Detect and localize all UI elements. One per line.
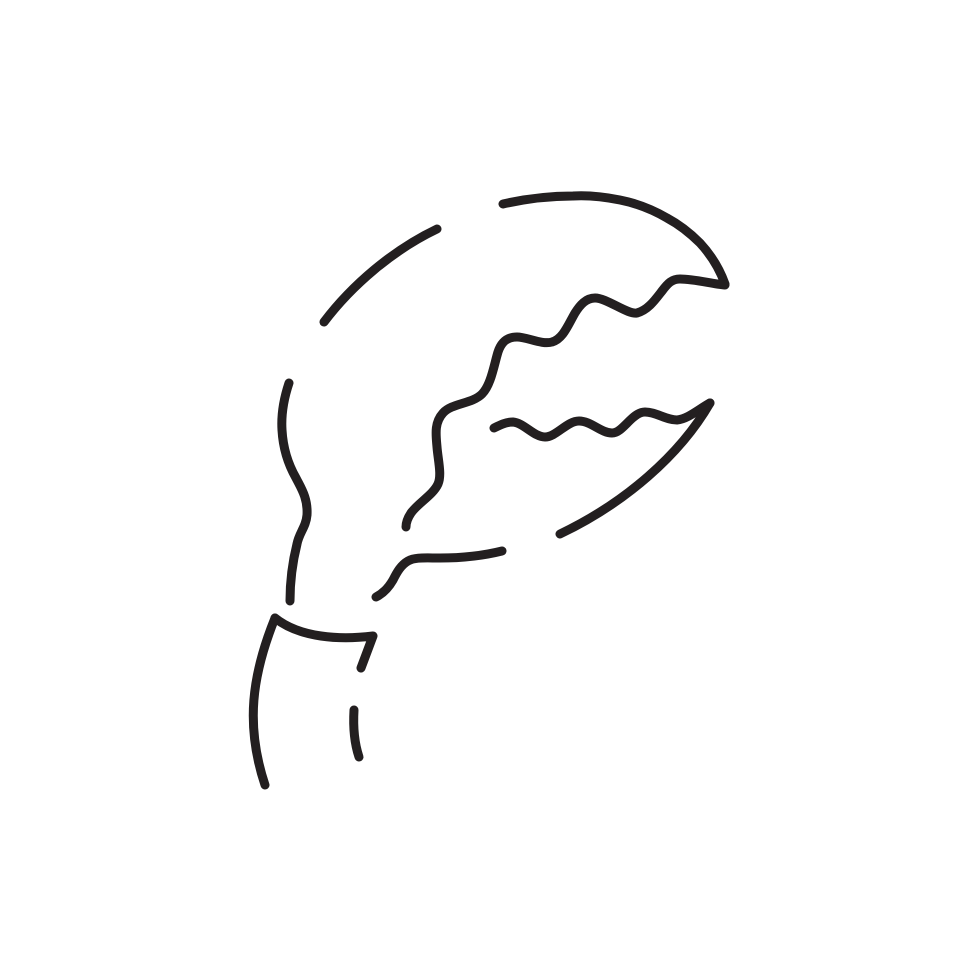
outer shell arc, upper left (324, 229, 437, 322)
upper claw outer arc (503, 196, 725, 284)
arm segment left (253, 618, 275, 785)
lower pincer outer edge (560, 403, 710, 534)
upper claw serrated inner edge (406, 279, 725, 527)
lower pincer serrated edge (494, 403, 710, 437)
left side of claw (282, 383, 307, 601)
arm right lower stroke (354, 710, 359, 757)
arm segment top and right (275, 618, 373, 668)
claw base curve (376, 551, 502, 597)
